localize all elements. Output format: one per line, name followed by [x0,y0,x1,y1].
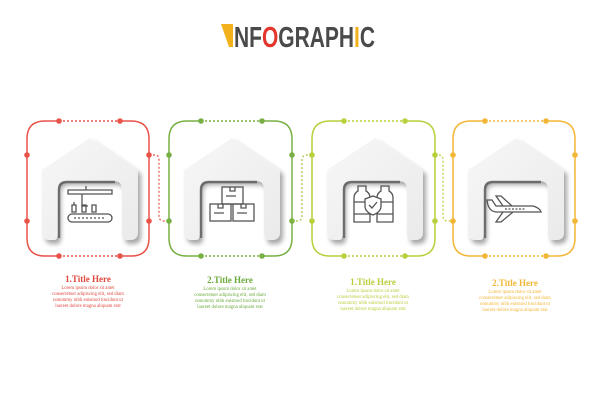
house 3 [327,138,423,240]
house 4 [468,138,564,240]
panel 4 frame [450,118,578,259]
connector 2-3 [292,155,312,221]
icon: boxes [210,187,254,221]
icon: bottles with shield [354,186,393,222]
panel 2 frame [166,118,295,259]
text block 3: consectetuer adipiscing elit, sed diam [337,295,409,300]
text block 2: consectetuer adipiscing elit, sed diam [194,293,266,298]
text block 1: Lorem ipsum dolor sit amet [61,286,115,291]
text block 2: Lorem ipsum dolor sit amet [203,287,257,292]
connector 1-2 [149,155,169,221]
icon: airplane [487,196,541,222]
icon: conveyor robot [68,186,112,222]
text block 3: laoreet dolore magna aliquam erat [340,307,406,312]
text block 4: 2.Title Here [492,278,538,288]
text block 3: 1.Title Here [350,277,396,287]
connector 3-4 [435,155,453,221]
text block 4: laoreet dolore magna aliquam erat [482,308,548,313]
text block 1: nonummy nibh euismod tincidunt ut [53,298,123,303]
text block 3 [337,277,409,312]
text block 1 [52,274,124,309]
text block 4 [479,278,551,313]
text block 3: nonummy nibh euismod tincidunt ut [338,301,408,306]
title: NFOGRAPHIC [234,22,375,54]
text block 2: 2.Title Here [207,275,253,285]
panel 3 frame [309,118,438,259]
text block 1: consectetuer adipiscing elit, sed diam [52,292,124,297]
house 2 [184,138,280,240]
text block 1: 1.Title Here [65,274,111,284]
text block 4: consectetuer adipiscing elit, sed diam [479,296,551,301]
house 1 [42,138,138,240]
text block 3: Lorem ipsum dolor sit amet [346,289,400,294]
text block 4: nonummy nibh euismod tincidunt ut [480,302,550,307]
text block 2: nonummy nibh euismod tincidunt ut [195,299,265,304]
panel 1 frame [24,118,152,259]
text block 2 [194,275,266,310]
text block 2: laoreet dolore magna aliquam erat [197,305,263,310]
text block 4: Lorem ipsum dolor sit amet [488,290,542,295]
text block 1: laoreet dolore magna aliquam erat [55,304,121,309]
